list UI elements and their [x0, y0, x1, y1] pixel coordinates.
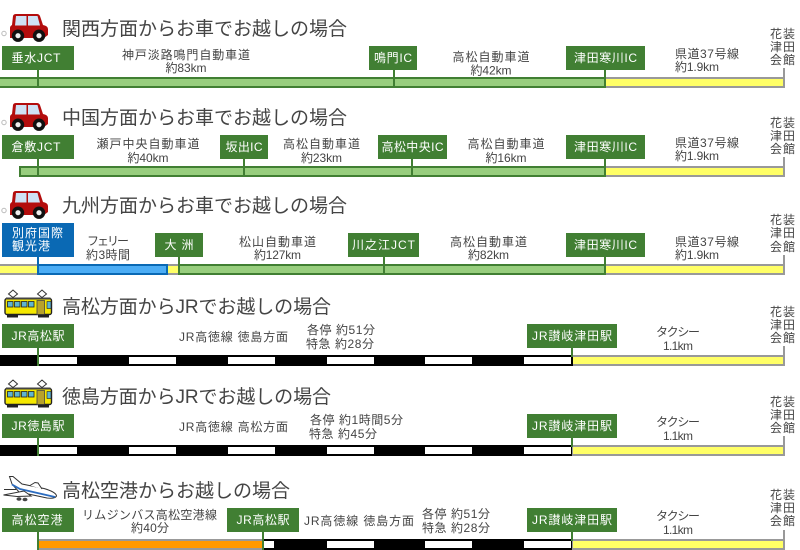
- label: 坂出IC: 坂出IC: [226, 140, 263, 154]
- route: Takamatsu Airport: [2, 476, 795, 550]
- destination: 花装津田会館: 花装: [770, 395, 795, 409]
- text: 所要時間: 各停 約1時間5分: [310, 412, 403, 427]
- text: 県道37号線: 約1.9km: [675, 148, 719, 163]
- text: 神戸淡路鳴門自動車道: 約83km: [166, 60, 206, 75]
- route: Chugoku by car: [2, 103, 795, 177]
- route: Tokushima by JR: [0, 380, 795, 456]
- label: 津田寒川IC: 津田寒川IC: [574, 140, 637, 154]
- icon: airplane: [4, 476, 56, 501]
- text: タクシー: [656, 325, 700, 353]
- destination: 花装津田会館: [770, 488, 795, 528]
- text: 所要時間: 各停 約51分: [307, 322, 375, 337]
- label: 大洲: [155, 233, 203, 257]
- text: 松山自動車道: 約127km: [254, 247, 301, 262]
- label: 別府国際観光港: 別府国際: [12, 226, 63, 240]
- label: 別府国際観光港: [2, 223, 74, 257]
- label: 垂水JCT: [2, 46, 74, 70]
- label: 鳴門IC: 鳴門IC: [374, 51, 412, 65]
- label: JR高松駅: [2, 324, 74, 348]
- text: 県道37号線: [675, 135, 739, 163]
- text: 県道37号線: [675, 234, 739, 262]
- icon: car: [2, 191, 48, 219]
- label: 川之江JCT: 川之江JCT: [352, 238, 416, 252]
- text: タクシー: [656, 509, 700, 537]
- label: 津田寒川IC: [566, 233, 645, 257]
- label: 高松中央IC: 高松中央IC: [382, 139, 444, 154]
- label: JR讃岐津田駅: JR讃岐津田駅: [532, 513, 612, 527]
- destination: 花装津田会館: 会館: [770, 142, 795, 156]
- text: 神戸淡路鳴門自動車道: 神戸淡路鳴門自動車道: [122, 47, 250, 62]
- road bar: [19, 157, 785, 177]
- icon: train: [5, 380, 52, 408]
- label: 津田寒川IC: 津田寒川IC: [574, 51, 637, 65]
- title: 高松空港からお越しの場合: [62, 480, 290, 502]
- text: 松山自動車道: 松山自動車道: [239, 235, 316, 249]
- label: JR高松駅: JR高松駅: [12, 329, 64, 343]
- text: JR高徳線 高松方面: JR高徳線 高松方面: [179, 419, 288, 434]
- text: 松山自動車道: [239, 235, 316, 262]
- text: 県道37号線: 県道37号線: [675, 46, 739, 61]
- destination: 花装津田会館: [770, 27, 795, 67]
- text: 瀬戸中央自動車道: [96, 136, 200, 165]
- label: 高松空港: 高松空港: [12, 513, 62, 527]
- title: 関西方面からお車でお越しの場合: [62, 18, 347, 40]
- label: JR讃岐津田駅: JR讃岐津田駅: [532, 329, 612, 343]
- label: JR讃岐津田駅: JR讃岐津田駅: [532, 419, 612, 433]
- destination: 花装津田会館: [770, 116, 795, 156]
- text: 所要時間: 特急 約45分: [309, 426, 377, 441]
- text: 所要時間: 各停 約51分: [422, 506, 490, 521]
- text: 瀬戸中央自動車道: 約40km: [128, 150, 168, 165]
- label: 川之江JCT: [348, 233, 419, 257]
- text: 高松自動車道: [452, 50, 530, 78]
- destination: 花装津田会館: 花装: [770, 27, 795, 41]
- text: 高松自動車道: 約23km: [301, 150, 342, 165]
- destination: 花装津田会館: 津田: [770, 226, 795, 240]
- icon: car: [2, 103, 48, 131]
- text: フェリー: 約3時間: [86, 247, 130, 262]
- icon: car: [2, 14, 48, 42]
- route: Kyushu by car and ferry: [0, 191, 795, 275]
- text: タクシー: タクシー: [656, 509, 700, 523]
- label: 高松中央IC: [378, 135, 447, 159]
- label: 高松空港: [2, 508, 74, 532]
- text: 高松自動車道: 高松自動車道: [450, 235, 527, 249]
- destination: 花装津田会館: 花装: [770, 213, 795, 227]
- rail and taxi bar: [0, 436, 785, 456]
- destination: 花装津田会館: 津田: [770, 318, 795, 332]
- text: リムジンバス高松空港線: リムジンバス高松空港線: [82, 507, 217, 522]
- destination: 花装津田会館: 花装: [770, 116, 795, 130]
- text: 高松自動車道: 高松自動車道: [452, 50, 530, 64]
- label: JR徳島駅: JR徳島駅: [12, 418, 64, 433]
- bus, rail and taxi bar: [37, 530, 785, 550]
- text: 神戸淡路鳴門自動車道: [122, 47, 250, 75]
- text: 高松自動車道: [468, 137, 544, 165]
- text: 高松自動車道: 約42km: [470, 62, 512, 78]
- label: 別府国際観光港: 観光港: [12, 239, 50, 253]
- text: 県道37号線: 約1.9km: [675, 247, 719, 262]
- text: タクシー: タクシー: [656, 325, 700, 339]
- text: 所要時間: 特急 約28分: [422, 520, 490, 535]
- text: タクシー: タクシー: [656, 415, 700, 429]
- label: 倉敷JCT: [2, 135, 74, 159]
- destination: 花装津田会館: 会館: [770, 53, 795, 67]
- text: 県道37号線: [675, 46, 739, 74]
- label: 垂水JCT: 垂水JCT: [12, 51, 61, 65]
- text: JR高徳線 徳島方面: JR高徳線 徳島方面: [304, 513, 414, 528]
- label: 津田寒川IC: [566, 46, 645, 70]
- destination: 花装津田会館: [770, 305, 795, 345]
- road bar: [0, 68, 785, 88]
- label: 坂出IC: [220, 135, 268, 159]
- label: 鳴門IC: [369, 46, 417, 70]
- label: 大洲: 大 洲: [164, 238, 194, 252]
- title: 高松方面からJRでお越しの場合: [62, 296, 331, 318]
- text: タクシー: 1.1km: [663, 339, 693, 353]
- text: 高松自動車道: 高松自動車道: [283, 137, 360, 151]
- destination: 花装津田会館: 会館: [770, 514, 795, 528]
- title: 徳島方面からJRでお越しの場合: [62, 386, 331, 408]
- label: JR讃岐津田駅: [527, 324, 617, 348]
- label: 倉敷JCT: 倉敷JCT: [12, 140, 61, 154]
- label: JR讃岐津田駅: [527, 508, 617, 532]
- destination: 花装津田会館: 会館: [770, 240, 795, 254]
- title: 中国方面からお車でお越しの場合: [62, 107, 347, 129]
- destination: 花装津田会館: 会館: [770, 331, 795, 345]
- title: 九州方面からお車でお越しの場合: [62, 195, 347, 217]
- text: 所要時間: 特急 約28分: [306, 336, 374, 351]
- text: 所要時間: [306, 322, 375, 351]
- text: JR高徳線 徳島方面: JR高徳線 徳島方面: [179, 329, 288, 344]
- text: 高松自動車道: [283, 137, 360, 165]
- destination: 花装津田会館: [770, 395, 795, 435]
- destination: 花装津田会館: [770, 213, 795, 254]
- icon: train: [5, 290, 52, 318]
- destination: 花装津田会館: 津田: [770, 129, 795, 143]
- destination: 花装津田会館: 花装: [770, 305, 795, 319]
- text: 所要時間: [309, 412, 403, 441]
- text: フェリー: [86, 234, 130, 262]
- text: タクシー: [656, 415, 700, 443]
- rail and taxi bar: [0, 346, 785, 366]
- text: 高松自動車道: [450, 235, 527, 262]
- text: 高松自動車道: 約16km: [486, 150, 526, 165]
- text: フェリー: フェリー: [87, 234, 129, 248]
- route: Kansai by car: [0, 14, 795, 88]
- label: JR讃岐津田駅: [527, 414, 617, 438]
- destination: 花装津田会館: 会館: [770, 421, 795, 435]
- text: 瀬戸中央自動車道: 瀬戸中央自動車道: [96, 136, 200, 151]
- text: タクシー: 1.1km: [663, 429, 693, 443]
- destination: 花装津田会館: 津田: [770, 501, 795, 515]
- label: JR高松駅: [227, 508, 299, 532]
- destination: 花装津田会館: 花装: [770, 488, 795, 502]
- text: 県道37号線: 県道37号線: [675, 234, 739, 249]
- label: 津田寒川IC: 津田寒川IC: [574, 238, 637, 252]
- label: JR高松駅: JR高松駅: [236, 513, 290, 527]
- text: タクシー: 1.1km: [663, 523, 693, 537]
- label: JR徳島駅: [2, 414, 74, 438]
- text: 県道37号線: 県道37号線: [675, 135, 739, 150]
- road and ferry bar: [0, 255, 785, 275]
- text: 高松自動車道: 約82km: [468, 247, 509, 262]
- text: リムジンバス高松空港線: 約40分: [131, 520, 169, 535]
- destination: 花装津田会館: 津田: [770, 40, 795, 54]
- text: リムジンバス高松空港線: [82, 507, 217, 535]
- label: 津田寒川IC: [566, 135, 645, 159]
- destination: 花装津田会館: 津田: [770, 408, 795, 422]
- route: Takamatsu by JR: [0, 290, 795, 366]
- text: 所要時間: [422, 506, 490, 535]
- text: 県道37号線: 約1.9km: [675, 59, 719, 74]
- text: 高松自動車道: 高松自動車道: [468, 137, 544, 151]
